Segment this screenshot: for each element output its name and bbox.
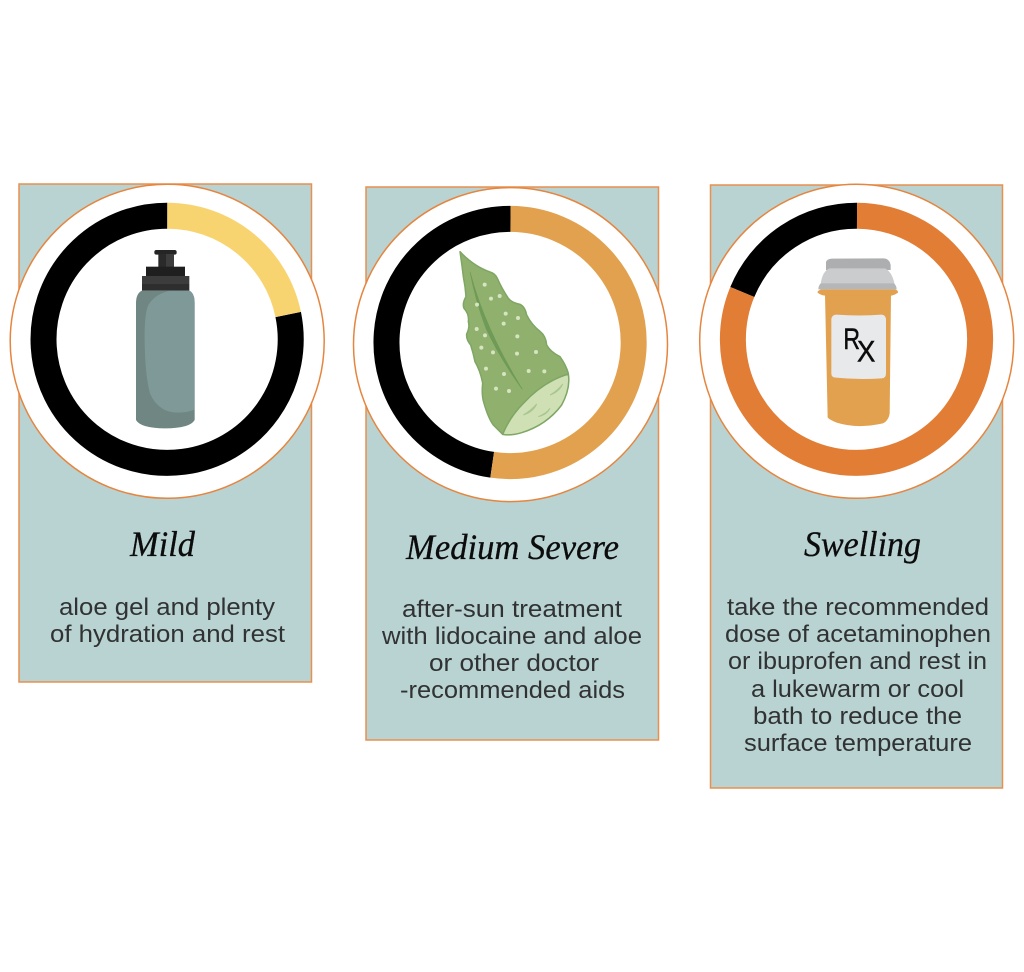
donut chart: mild [10,184,324,498]
panel: medium severe [354,187,668,740]
donut chart: swelling [700,184,1014,498]
text block: swelling [725,594,991,757]
icon: aloe leaf [460,252,569,435]
icon label: Rx [843,323,875,368]
text block: swelling: bath to reduce the [753,703,962,730]
text block: mild: of hydration and rest [50,621,285,648]
icon: prescription bottle [817,258,898,426]
text block: medium severe: with lidocaine and aloe [381,623,642,650]
icon: lotion bottle [136,250,197,428]
panel: swelling [700,184,1014,788]
text block: swelling: a lukewarm or cool [751,676,964,703]
text block: mild [50,594,285,648]
text block: swelling: surface temperature [744,730,972,757]
text block: swelling: or ibuprofen and rest in [728,648,987,675]
donut chart: medium severe [354,188,668,502]
panel background: medium severe [366,187,658,740]
panel: mild [10,184,324,682]
text block: swelling: take the recommended [727,594,989,621]
text block: mild: aloe gel and plenty [59,594,275,621]
panel background: mild [19,184,312,682]
panel background: swelling [710,185,1002,788]
text block: medium severe: or other doctor [429,650,599,677]
heading: swelling: Swelling [804,524,921,564]
icon label: Rx: X [857,335,875,368]
text block: swelling: dose of acetaminophen [725,621,991,648]
text block: medium severe: after-sun treatment [402,596,622,623]
heading: mild: Mild [129,524,196,564]
text block: medium severe [381,596,642,704]
text block: medium severe: -recommended aids [400,677,625,704]
icon label: Rx: R [843,323,860,356]
heading: medium severe: Medium Severe [405,527,619,567]
